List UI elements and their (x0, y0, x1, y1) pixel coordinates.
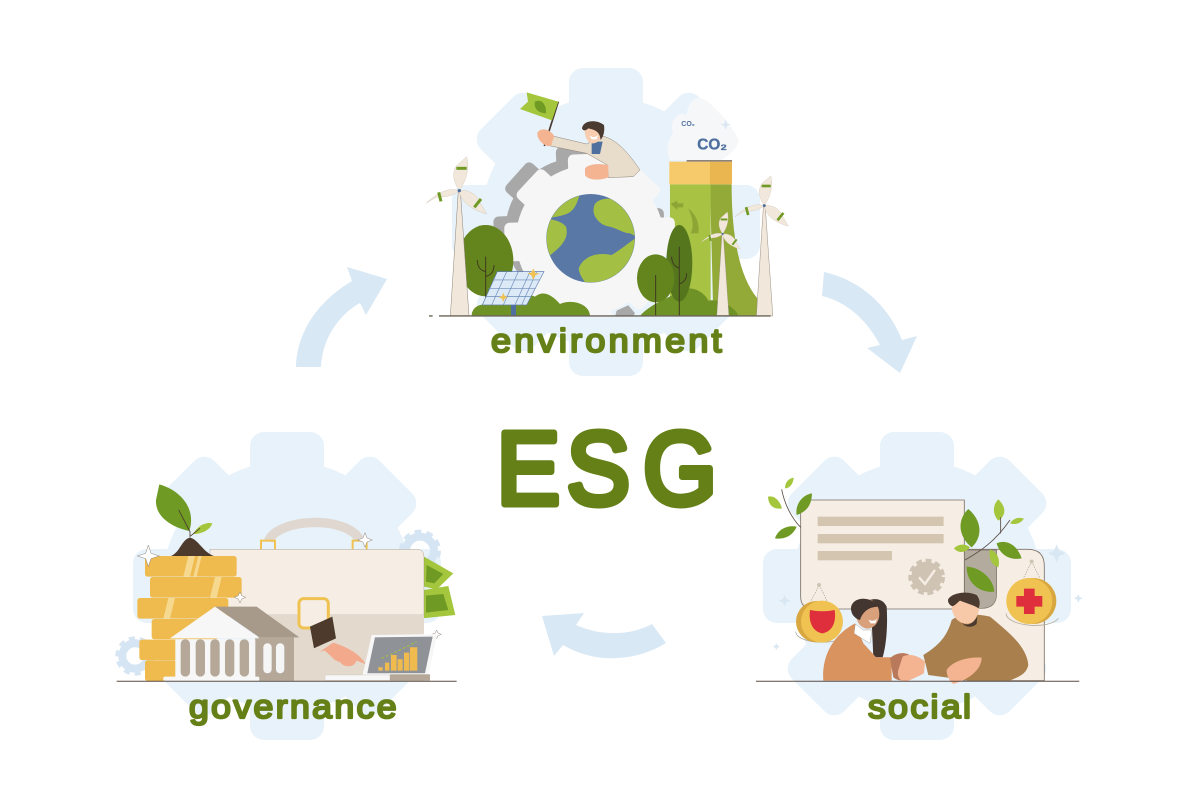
background gear: social (763, 432, 1071, 740)
gear lower gray notch (615, 305, 635, 316)
label: governance: governance (189, 689, 399, 726)
arrow: environment to social (822, 272, 917, 373)
laptop (325, 634, 437, 681)
handshake (890, 653, 925, 682)
background gear: governance (133, 432, 441, 740)
illustration: governance (117, 484, 457, 681)
ground line (429, 314, 771, 318)
sparkles (137, 533, 441, 639)
title: ESG: ESG (497, 410, 717, 526)
right coin with cross (1006, 560, 1058, 625)
person holding flag (537, 121, 640, 180)
certificate badge (910, 560, 943, 594)
wind turbine right (735, 176, 788, 316)
sleeve and pointing hand (310, 617, 366, 666)
smoke cloud with CO2: CO₂ (697, 136, 727, 153)
solar panel (482, 268, 544, 316)
arrow: governance to environment (296, 267, 387, 367)
smoke cloud with CO2 (668, 98, 739, 160)
smoke cloud with CO2: CO₂ (681, 121, 695, 128)
back panel (963, 549, 1044, 681)
plant (156, 484, 214, 556)
gray plant pot (964, 550, 997, 608)
right trees (637, 225, 692, 316)
certificate (801, 500, 964, 609)
man (923, 593, 1028, 684)
white gear (504, 153, 676, 325)
wind turbine left (426, 157, 487, 316)
label: social: social (868, 689, 973, 726)
background gear: environment (452, 68, 760, 376)
briefcase (210, 549, 424, 681)
left coin with shield (796, 583, 843, 643)
small gear left (117, 638, 153, 674)
briefcase buckle (299, 599, 328, 628)
globe (546, 194, 635, 283)
money (422, 557, 455, 618)
ground line (756, 680, 1079, 683)
small gear right (401, 532, 439, 570)
coin stack (137, 556, 242, 681)
left branch (768, 478, 812, 539)
sparkles (773, 544, 1083, 650)
flag (520, 92, 558, 146)
left tree (458, 225, 513, 316)
wind turbine small (701, 212, 740, 315)
chimney tower (669, 160, 757, 316)
illustration: social (756, 478, 1083, 684)
gray back gear (493, 148, 664, 272)
arrow: social to governance (542, 613, 666, 658)
woman (823, 599, 892, 681)
briefcase handle (268, 522, 359, 541)
bank building (163, 607, 299, 681)
ground line (117, 680, 457, 683)
right plant (954, 499, 1024, 592)
label: environment: environment (491, 323, 725, 360)
briefcase handle clips (261, 541, 367, 549)
bushes (472, 288, 738, 316)
illustration: environment (426, 92, 788, 325)
